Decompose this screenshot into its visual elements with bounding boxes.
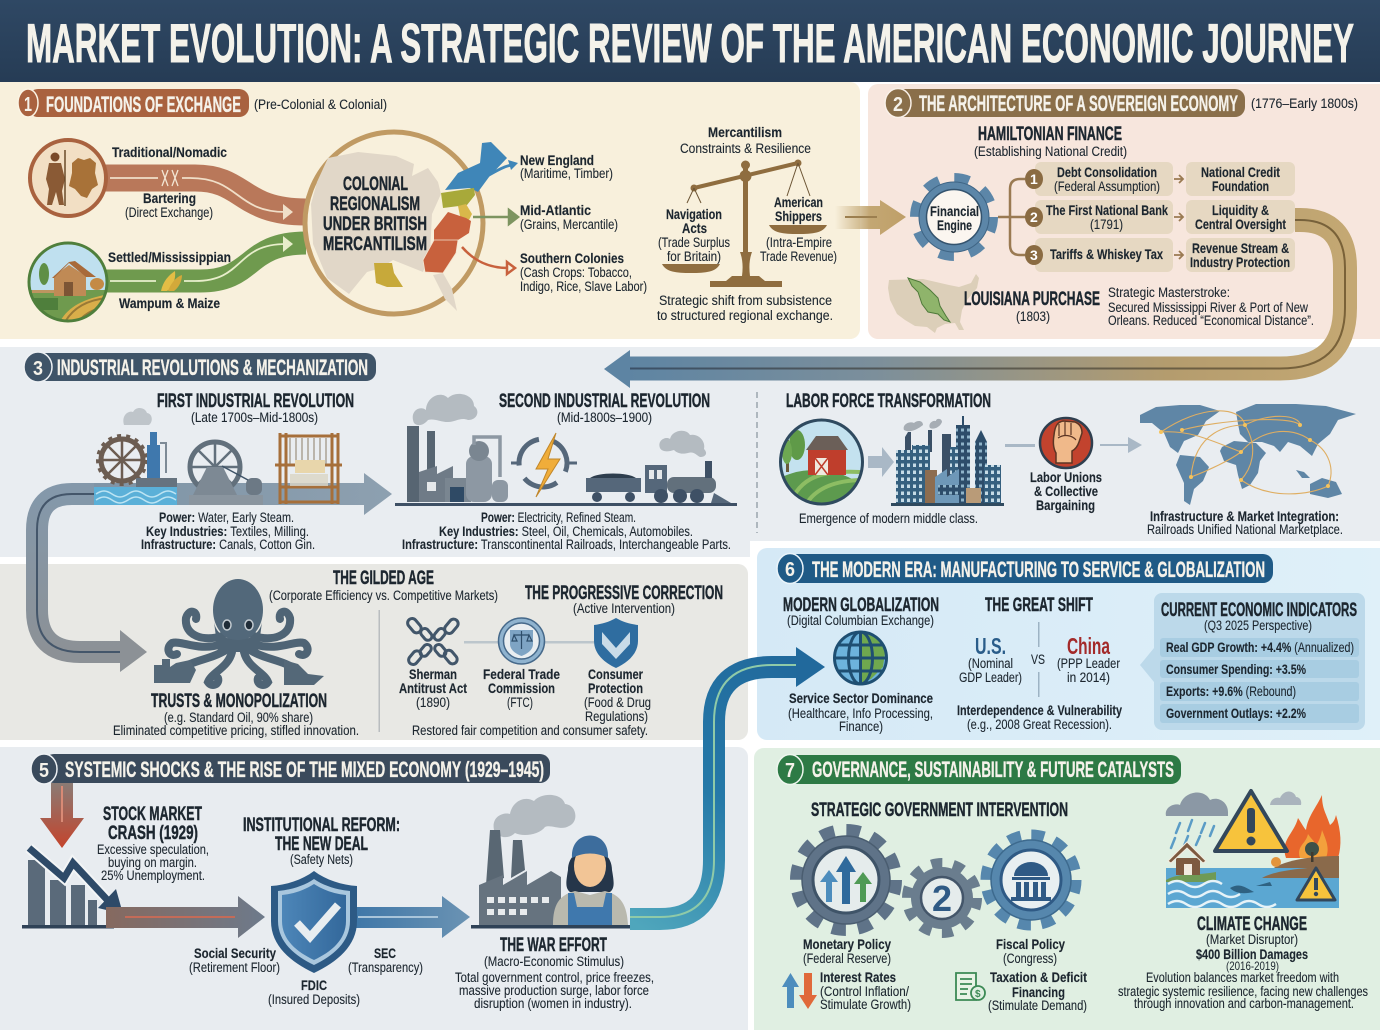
text: progressive correction result: Restored fair competition and consumer safety. <box>412 723 648 738</box>
arrow: red drop into crash <box>40 783 84 848</box>
heading: section 7: 7 <box>785 760 795 782</box>
text: modern globalization <box>783 595 939 628</box>
text: institutional reform: (Safety Nets) <box>290 852 353 867</box>
icon: federal trade commission seal <box>498 618 544 664</box>
text: southern colonies: (Cash Crops: Tobacco, <box>520 265 632 280</box>
text: federal trade commission: Commission <box>488 680 555 696</box>
icon: new england arrowhead <box>508 160 518 170</box>
text: labor unions: Labor Unions <box>1030 469 1102 485</box>
icon: balance scale <box>662 160 827 287</box>
row: debt consolidation: (Federal Assumption) <box>1054 179 1160 194</box>
row: first national bank <box>1025 200 1295 234</box>
arrow: first revolution down to gilded age <box>37 494 147 672</box>
text: interest rates: (Control Inflation/ <box>820 984 909 999</box>
text: climate change: (2016-2019) <box>1226 959 1279 973</box>
text: american shippers: Trade Revenue) <box>760 249 837 264</box>
icon: consumer protection shield <box>594 618 638 668</box>
text: second industrial revolution <box>499 391 710 425</box>
text: navigation acts: Navigation <box>666 206 722 222</box>
text: first revolution details: Power: Water, Early Steam. <box>159 510 294 525</box>
text: interest rates <box>820 969 911 1012</box>
text: second revolution details: Key Industries: Steel, Oil, Chemicals, Automobiles. <box>439 524 693 539</box>
row: first national bank: The First National Bank <box>1046 202 1168 218</box>
text: american shippers: American <box>774 194 823 210</box>
text: service sector dominance <box>788 690 933 734</box>
text: the progressive correction <box>525 583 723 616</box>
text: southern colonies: Southern Colonies <box>520 250 624 266</box>
heading: section 3: 3 <box>33 358 43 380</box>
arrow: farm to city <box>868 447 894 477</box>
icon: interest rate arrows <box>782 973 817 1009</box>
text: consumer protection: (Food & Drug <box>584 695 651 710</box>
text: hamiltonian finance: HAMILTONIAN FINANCE <box>978 124 1122 145</box>
text: navigation acts: (Trade Surplus <box>658 235 730 250</box>
text: federal trade commission: Federal Trade <box>483 666 560 682</box>
text: settled mississippian: Settled/Mississippian <box>108 249 231 265</box>
icon: new deal shield with check <box>271 871 357 973</box>
text: the war effort: (Macro-Economic Stimulus) <box>484 954 624 969</box>
heading: section 7 <box>777 754 1181 784</box>
text: interdependence and vulnerability: (e.g., 2008 Great Recession). <box>967 717 1112 732</box>
map: colonial regions <box>305 132 507 314</box>
icon: settled farm scene <box>25 243 115 324</box>
text: sherman antitrust act: (1890) <box>416 695 450 710</box>
text: service sector dominance: Service Sector Dominance <box>789 690 933 706</box>
text: mercantilism: Mercantilism <box>708 124 782 140</box>
text: interest rates: Stimulate Growth) <box>820 997 911 1012</box>
text: louisiana purchase: (1803) <box>1016 309 1050 324</box>
panel: industrial revolutions and mechanization <box>0 347 1380 557</box>
panel: current economic indicators: (Q3 2025 Perspective) <box>1204 618 1312 633</box>
text: consumer protection: Consumer <box>588 666 643 682</box>
text: american shippers: Shippers <box>775 208 822 224</box>
text: bartering: Bartering <box>143 190 196 206</box>
comparison: US vs China: in 2014) <box>1067 670 1110 685</box>
panel: architecture of a sovereign economy <box>868 84 1380 339</box>
text: second industrial revolution: SECOND INDUSTRIAL REVOLUTION <box>499 391 710 412</box>
text: the gilded age: THE GILDED AGE <box>333 568 434 589</box>
text: trusts and monopolization: (e.g. Standard Oil, 90% share) <box>164 710 313 725</box>
text: the great shift: THE GREAT SHIFT <box>985 595 1093 616</box>
arrow: first to second revolution <box>94 473 392 515</box>
heading: section 5: SYSTEMIC SHOCKS & THE RISE OF THE MIXED ECONOMY (1929–1945) <box>65 757 544 782</box>
panel: the modern era <box>757 548 1380 740</box>
icon: water wheel mill <box>94 408 177 505</box>
icon: financial engine gear <box>915 178 993 256</box>
text: monetary policy: (Federal Reserve) <box>803 951 891 966</box>
arrow: mercantilism into hamiltonian finance <box>835 200 906 235</box>
text: trusts and monopolization <box>113 691 359 738</box>
icon: louisiana purchase map <box>888 274 979 333</box>
text: labor unions: & Collective <box>1034 483 1098 499</box>
row: first national bank: 2 <box>1030 209 1038 225</box>
text: monetary policy <box>803 936 891 966</box>
text: hamiltonian finance <box>974 124 1127 159</box>
icon: labor fist <box>1040 418 1092 468</box>
comparison: US vs China: VS <box>1031 652 1045 667</box>
text: stock market crash: Excessive speculation, <box>97 842 209 857</box>
text: first industrial revolution: FIRST INDUSTRIAL REVOLUTION <box>157 391 354 412</box>
arrow: war effort to modern globalization <box>630 647 825 919</box>
icon: second revolution factory <box>407 426 508 502</box>
text: second revolution details: Infrastructure: Transcontinental Railroads, Interchangeable Parts. <box>402 537 731 552</box>
heading: section 3: INDUSTRIAL REVOLUTIONS & MECHANIZATION <box>57 355 368 380</box>
icon: wartime factory <box>471 795 636 928</box>
text: interest rates: Interest Rates <box>820 969 896 985</box>
icon: smoke above factory <box>413 394 477 425</box>
panel: current economic indicators: Exports: +9.6% (Rebound) <box>1166 684 1296 699</box>
text: the war effort: massive production surge, labor force <box>459 983 649 998</box>
comparison: US vs China <box>959 622 1120 697</box>
text: second industrial revolution: (Mid-1800s–1900) <box>557 410 652 425</box>
text: mid-atlantic <box>520 202 618 232</box>
text: labor unions <box>1030 469 1102 513</box>
icon: woman industrial worker <box>553 836 628 925</box>
text: fiscal policy <box>996 936 1065 966</box>
text: the progressive correction: (Active Intervention) <box>573 601 675 616</box>
icon: steam engine flywheel <box>189 442 263 505</box>
row: first national bank: Liquidity & <box>1212 202 1269 218</box>
panel: current economic indicators: Government Outlays: +2.2% <box>1166 706 1306 721</box>
text: stock market crash: buying on margin. <box>108 855 197 870</box>
text: climate change: CLIMATE CHANGE <box>1197 914 1307 935</box>
text: first industrial revolution <box>157 391 354 425</box>
text: interdependence and vulnerability <box>957 702 1122 732</box>
text: colonial regionalism <box>323 174 427 255</box>
text: FDIC: FDIC <box>301 977 327 993</box>
icon: nomadic hunter and hide <box>30 140 106 216</box>
diagram: branch connectors <box>998 179 1034 255</box>
icon: fiscal policy gear <box>986 835 1076 925</box>
icon: financial engine gear: Financial <box>930 203 979 219</box>
text: taxation and deficit financing <box>988 969 1087 1013</box>
text: the war effort: disruption (women in industry). <box>474 996 632 1011</box>
text: first revolution details: Infrastructure: Canals, Cotton Gin. <box>141 537 315 552</box>
heading: section 1 <box>18 89 249 117</box>
panel: foundations of exchange <box>0 82 860 339</box>
text: strategic shift <box>657 293 833 323</box>
text: southern colonies <box>520 250 647 294</box>
text: fiscal policy: Fiscal Policy <box>996 936 1065 952</box>
panel: governance, sustainability and future catalysts <box>754 748 1380 1030</box>
text: the gilded age <box>269 568 498 603</box>
text: monetary policy: Monetary Policy <box>803 936 891 952</box>
text: first industrial revolution: (Late 1700s–Mid-1800s) <box>191 410 318 425</box>
panel: gilded age and progressive correction <box>0 564 748 740</box>
row: tariffs and whiskey tax: Industry Protection <box>1190 254 1290 270</box>
text: stock market crash: 25% Unemployment. <box>101 868 205 883</box>
text: louisiana purchase: LOUISIANA PURCHASE <box>964 289 1100 310</box>
text: american shippers <box>760 194 837 264</box>
text: labor unions: Bargaining <box>1036 497 1095 513</box>
row: tariffs and whiskey tax: 3 <box>1030 247 1038 263</box>
icon: broken chain <box>406 617 460 666</box>
text: the gilded age: (Corporate Efficiency vs. Competitive Markets) <box>269 588 498 603</box>
text: bartering: (Direct Exchange) <box>125 205 213 220</box>
text: strategic masterstroke <box>1108 285 1314 328</box>
icon: connecting line for remedies <box>464 641 594 644</box>
comparison: US vs China: China <box>1067 633 1110 659</box>
text: first revolution details <box>141 510 315 552</box>
icon: steam locomotive with coal car <box>586 431 731 503</box>
text: taxation and deficit financing: (Stimulate Demand) <box>988 998 1087 1013</box>
text: section 2 date range: (1776–Early 1800s) <box>1251 96 1358 111</box>
heading: section 2: 2 <box>893 94 903 116</box>
text: strategic shift: Strategic shift from subsistence <box>659 293 832 308</box>
text: hamiltonian finance: (Establishing National Credit) <box>974 144 1127 159</box>
text: trusts and monopolization: Eliminated competitive pricing, stifled innovation. <box>113 723 359 738</box>
arrow: new england trade <box>489 165 512 175</box>
text: the war effort <box>455 935 654 1011</box>
icon: electricity bolt <box>511 431 577 497</box>
row: debt consolidation <box>1025 162 1295 196</box>
row: tariffs and whiskey tax <box>1025 238 1295 272</box>
text: the war effort: Total government control, price freezes, <box>455 970 654 985</box>
text: navigation acts: Acts <box>682 220 707 236</box>
text: climate change <box>1118 914 1368 1011</box>
text: federal trade commission: (FTC) <box>507 695 533 710</box>
text: consumer protection: Regulations) <box>585 709 648 724</box>
text: SEC <box>348 945 423 975</box>
panel: current economic indicators: Real GDP Growth: +4.4% (Annualized) <box>1166 640 1354 655</box>
text: colonial regionalism: UNDER BRITISH <box>323 214 427 235</box>
text: strategic shift: to structured regional exchange. <box>657 308 833 323</box>
arrow: crash to reform <box>106 896 265 938</box>
text: fiscal policy: (Congress) <box>1003 951 1057 966</box>
text: SEC: SEC <box>374 945 396 961</box>
arrow: wampum and maize stream <box>100 236 306 291</box>
text: sherman antitrust act <box>399 666 467 710</box>
heading: section 2 <box>885 88 1245 118</box>
heading: section 6: 6 <box>785 559 795 581</box>
row: tariffs and whiskey tax: Tariffs & Whiskey Tax <box>1050 246 1163 262</box>
text: institutional reform: THE NEW DEAL <box>275 834 368 855</box>
panel: current economic indicators <box>1140 593 1365 730</box>
text: stock market crash: STOCK MARKET <box>103 804 202 825</box>
text: the progressive correction: THE PROGRESSIVE CORRECTION <box>525 583 723 604</box>
text: social security <box>189 945 280 975</box>
text: stock market crash <box>97 804 209 883</box>
icon: textile loom <box>275 433 342 504</box>
text: climate change: Evolution balances market freedom with <box>1146 970 1339 985</box>
heading: section 5 <box>31 754 550 784</box>
text: colonial regionalism: MERCANTILISM <box>323 234 427 255</box>
subheading: strategic government intervention: STRATEGIC GOVERNMENT INTERVENTION <box>811 800 1068 821</box>
text: strategic masterstroke: Strategic Masterstroke: <box>1108 285 1230 300</box>
icon: financial engine gear: Engine <box>937 217 972 233</box>
text: FDIC <box>268 977 360 1007</box>
arrow: bartering stream <box>100 168 306 220</box>
text: colonial regionalism: REGIONALISM <box>330 194 420 215</box>
text: climate change: (Market Disruptor) <box>1206 932 1298 947</box>
text: southern colonies: Indigo, Rice, Slave Labor) <box>520 279 647 294</box>
text: modern globalization: (Digital Columbian Exchange) <box>787 613 934 628</box>
text: modern globalization: MODERN GLOBALIZATION <box>783 595 939 616</box>
text: mid-atlantic: Mid-Atlantic <box>520 202 591 218</box>
heading: section 1: FOUNDATIONS OF EXCHANGE <box>46 92 241 117</box>
text: infrastructure and market integration: Railroads Unified National Marketplace. <box>1147 522 1343 537</box>
text: taxation and deficit financing: Financing <box>1012 984 1065 1000</box>
comparison: US vs China: GDP Leader) <box>959 670 1022 685</box>
arrow: sovereign economy to industrial revolutions <box>604 220 1345 388</box>
text: consumer protection <box>584 666 651 724</box>
text: strategic masterstroke: Orleans. Reduced “Economical Distance”. <box>1108 313 1314 328</box>
icon: rural farm circle <box>779 418 864 506</box>
heading: section 1: 1 <box>24 94 32 116</box>
text: american shippers: (Intra-Empire <box>766 235 832 250</box>
text: new england: New England <box>520 152 594 168</box>
chart: world trade network map <box>1140 404 1356 505</box>
text: the war effort: THE WAR EFFORT <box>500 935 607 956</box>
text: new england <box>520 152 613 181</box>
icon: tax document: $ <box>975 989 981 1000</box>
text: stock market crash: CRASH (1929) <box>108 823 198 844</box>
text: mercantilism <box>680 124 811 156</box>
panel: systemic shocks and the mixed economy <box>0 747 748 1030</box>
row: debt consolidation: National Credit <box>1201 164 1280 180</box>
text: SEC: (Transparency) <box>348 960 423 975</box>
heading: section 5: 5 <box>39 760 49 782</box>
text: trusts and monopolization: TRUSTS & MONOPOLIZATION <box>151 691 327 712</box>
panel: current economic indicators: Consumer Spending: +3.5% <box>1166 662 1306 677</box>
icon: monetary policy gear <box>796 830 896 930</box>
icon: octopus monopoly <box>154 579 324 685</box>
text: sherman antitrust act: Antitrust Act <box>399 680 467 696</box>
text: first revolution details: Key Industries: Textiles, Milling. <box>146 524 309 539</box>
text: mercantilism: Constraints & Resilience <box>680 141 811 156</box>
text: emergence of middle class: Emergence of modern middle class. <box>799 511 978 526</box>
arrow: reform to war effort <box>355 896 470 938</box>
icon: tax document <box>956 973 985 1000</box>
row: first national bank: (1791) <box>1090 217 1123 232</box>
arrow: mid-atlantic trade <box>473 210 518 224</box>
text: mid-atlantic: (Grains, Mercantile) <box>520 217 618 232</box>
text: bartering <box>125 190 213 220</box>
text: social security: Social Security <box>194 945 276 961</box>
row: debt consolidation: Debt Consolidation <box>1057 164 1157 180</box>
text: colonial regionalism: COLONIAL <box>343 174 408 195</box>
icon: linking gear 2 <box>907 863 977 933</box>
text: FDIC: (Insured Deposits) <box>268 992 360 1007</box>
text: social security: (Retirement Floor) <box>189 960 280 975</box>
text: second revolution details: Power: Electricity, Refined Steam. <box>481 510 636 525</box>
row: debt consolidation: Foundation <box>1212 178 1269 194</box>
text: federal trade commission <box>483 666 560 710</box>
row: first national bank: Central Oversight <box>1195 216 1286 232</box>
arrow: southern colonies trade <box>462 247 515 274</box>
text: louisiana purchase <box>964 289 1100 324</box>
text: section 1 date range: (Pre-Colonial & Colonial) <box>254 97 387 112</box>
text: wampum and maize: Wampum & Maize <box>119 295 220 311</box>
row: tariffs and whiskey tax: Revenue Stream & <box>1192 240 1289 256</box>
icon: industrial city <box>891 416 1004 506</box>
comparison: US vs China: (PPP Leader <box>1057 656 1120 671</box>
text: navigation acts: for Britain) <box>667 249 721 264</box>
text: taxation and deficit financing: Taxation & Deficit <box>990 969 1087 985</box>
icon: globe <box>834 632 886 684</box>
text: interdependence and vulnerability: Interdependence & Vulnerability <box>957 702 1122 718</box>
text: navigation acts <box>658 206 730 264</box>
text: service sector dominance: Finance) <box>839 719 883 734</box>
text: climate change: $400 Billion Damages <box>1196 946 1308 962</box>
icon: linking gear 2: 2 <box>932 878 952 919</box>
text: labor force transformation: LABOR FORCE TRANSFORMATION <box>786 391 991 412</box>
text: strategic masterstroke: Secured Mississippi River & Port of New <box>1108 300 1308 315</box>
arrow: city to unions <box>1005 444 1035 447</box>
heading: section 3 <box>24 352 376 382</box>
icon: climate hazards scene <box>1166 791 1340 908</box>
text: infrastructure and market integration <box>1147 508 1343 537</box>
text: service sector dominance: (Healthcare, Info Processing, <box>788 706 933 721</box>
text: institutional reform <box>243 815 400 867</box>
chart: declining market bars <box>22 848 123 928</box>
comparison: US vs China: U.S. <box>975 633 1006 659</box>
comparison: US vs China: (Nominal <box>968 656 1013 671</box>
text: traditional nomadic: Traditional/Nomadic <box>112 144 227 160</box>
arrow: unions to market integration <box>1100 437 1142 453</box>
text: consumer protection: Protection <box>588 680 643 696</box>
text: second revolution details <box>402 510 731 552</box>
heading: section 6 <box>777 554 1273 584</box>
text: sherman antitrust act: Sherman <box>409 666 457 682</box>
text: new england: (Maritime, Timber) <box>520 166 613 181</box>
text: institutional reform: INSTITUTIONAL REFORM: <box>243 815 400 836</box>
text: infrastructure and market integration: Infrastructure & Market Integration: <box>1150 508 1339 524</box>
row: debt consolidation: 1 <box>1030 171 1038 187</box>
